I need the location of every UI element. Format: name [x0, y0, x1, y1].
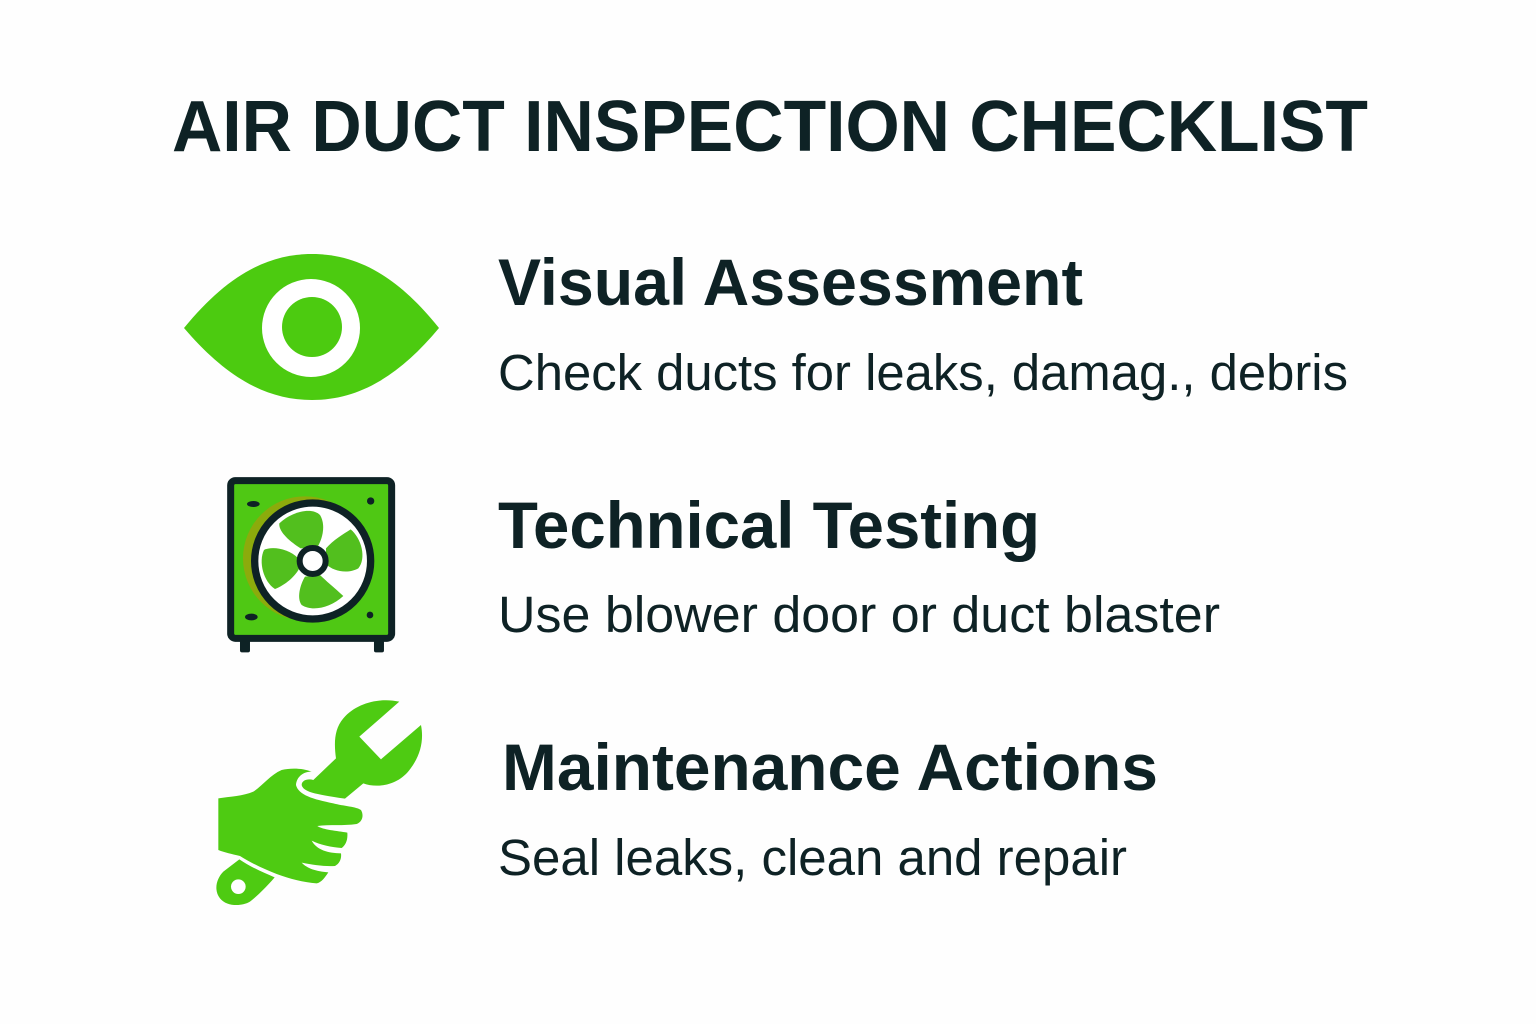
- icon: eye: [184, 254, 439, 400]
- heading: visual assessment: Visual Assessment: [498, 245, 1083, 319]
- panel: technical testing: [231, 481, 1220, 652]
- heading: technical testing: Technical Testing: [498, 488, 1040, 562]
- icon: hand holding wrench: [216, 700, 422, 905]
- title: AIR DUCT INSPECTION CHECKLIST: [172, 87, 1368, 167]
- text: visual assessment description: Check ducts for leaks, damag., debris: [498, 344, 1348, 401]
- text: technical testing description: Use blower door or duct blaster: [498, 586, 1220, 643]
- heading: maintenance actions: Maintenance Actions: [502, 730, 1158, 804]
- text: maintenance actions description: Seal leaks, clean and repair: [498, 829, 1127, 886]
- icon: blower fan: [231, 481, 392, 652]
- panel: maintenance actions: [216, 700, 1158, 905]
- panel: visual assessment: [184, 245, 1348, 401]
